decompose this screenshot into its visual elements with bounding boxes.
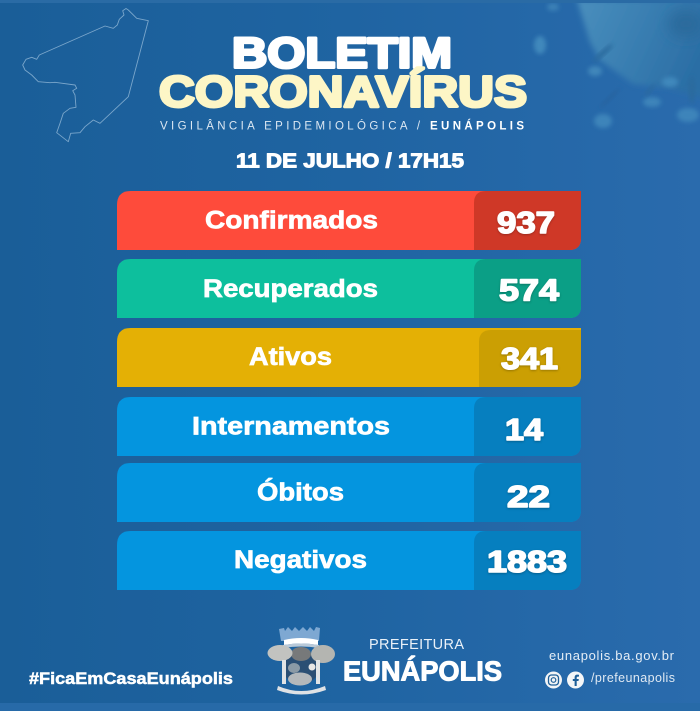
panel: Negativos: [117, 531, 581, 590]
virus illustration (blurred, top right): [534, 0, 700, 128]
footer logo text: [343, 637, 502, 686]
panel: Ativos: [117, 328, 581, 387]
panel: Internamentos: [117, 397, 581, 456]
icon: municipality map outline: [23, 8, 148, 142]
date and time: 11 DE JULHO / 17H15: [236, 150, 464, 172]
icon: instagram: [545, 672, 562, 688]
panel: Confirmados: [117, 191, 581, 250]
value cell: Confirmados: [474, 191, 581, 250]
label: Negativos: Negativos: [234, 546, 367, 574]
label: Ativos: Ativos: [249, 343, 332, 371]
title line: CORONAVÍRUS: CORONAVÍRUS: [159, 66, 527, 116]
value cell: Óbitos: [474, 463, 581, 522]
value: 1883: 1883: [487, 544, 567, 579]
value cell: Ativos: [479, 330, 581, 387]
PREFEITURA: PREFEITURA: [369, 637, 464, 653]
label: Confirmados: Confirmados: [205, 206, 378, 234]
website: eunapolis.ba.gov.br: [549, 648, 675, 663]
title: [159, 30, 527, 116]
subtitle: VIGILÂNCIA EPIDEMIOLÓGICA / EUNÁPOLIS: [160, 120, 524, 132]
value: 22: 22: [507, 479, 550, 514]
icon: municipal coat of arms: [268, 627, 335, 694]
label: Recuperados: Recuperados: [203, 275, 378, 303]
EUNÁPOLIS: EUNÁPOLIS: [343, 656, 502, 686]
hashtag: #FicaEmCasaEunápolis: [29, 669, 233, 688]
title line: BOLETIM: BOLETIM: [232, 30, 452, 78]
panel: Óbitos: [117, 463, 581, 522]
value: 14: 14: [505, 412, 544, 447]
value cell: Recuperados: [474, 259, 581, 318]
social handle: /prefeunapolis: [591, 671, 675, 685]
value cell: Negativos: [474, 531, 581, 590]
value: 574: 574: [499, 272, 560, 308]
panel: Recuperados: [117, 259, 581, 318]
value: 341: 341: [501, 341, 558, 376]
label: Óbitos: Óbitos: [257, 476, 344, 506]
label: Internamentos: Internamentos: [192, 412, 390, 440]
value: 937: 937: [497, 205, 555, 240]
icon: facebook: [567, 672, 584, 688]
value cell: Internamentos: [474, 397, 581, 456]
